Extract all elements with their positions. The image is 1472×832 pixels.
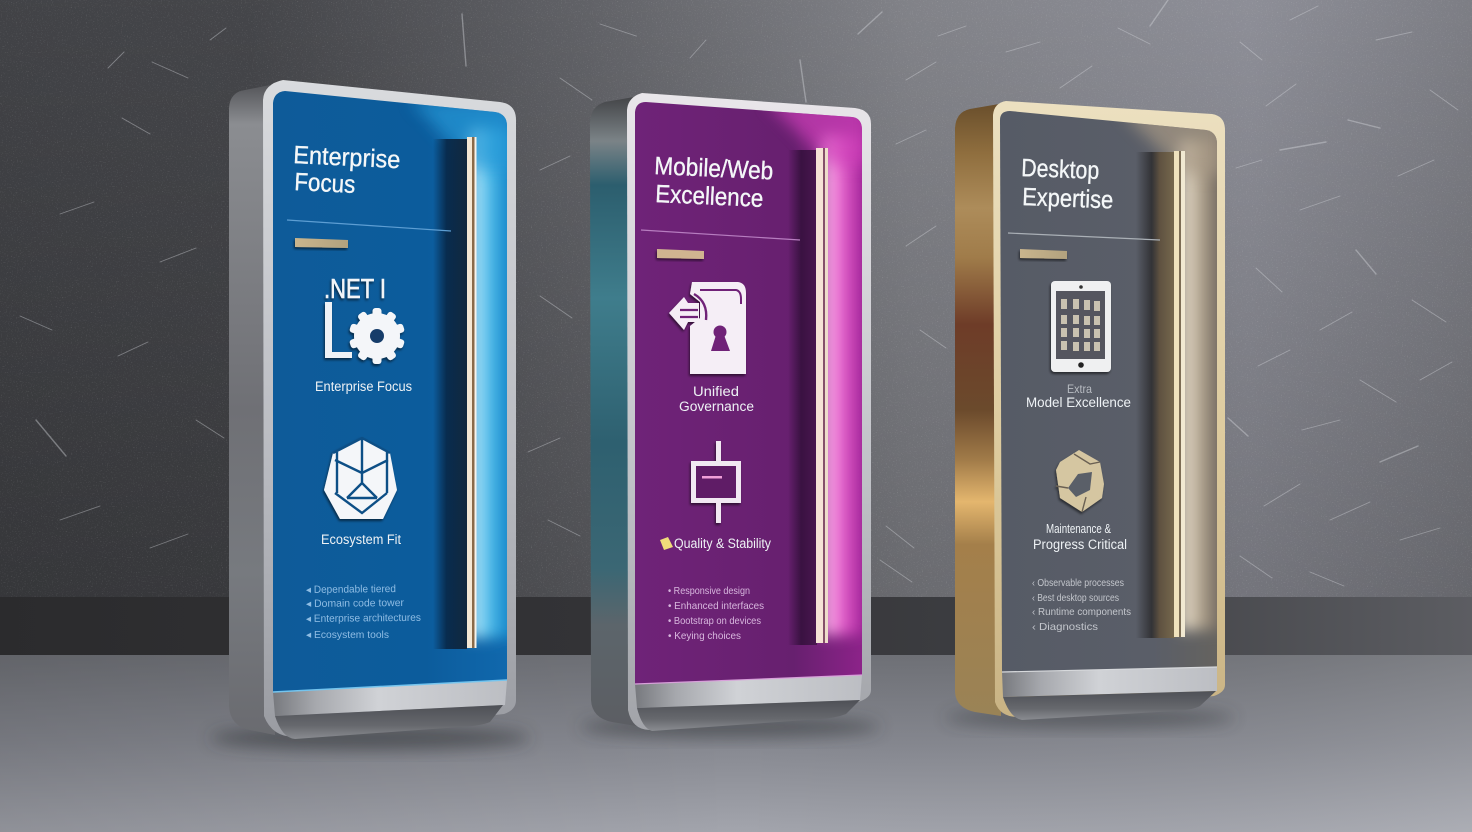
- label: Maintenance & Progress Critical: [1033, 522, 1127, 552]
- label: Model Excellence: Extra: [1067, 382, 1092, 396]
- icon: unified document with lock: [669, 282, 746, 374]
- heading: Desktop: [1021, 154, 1100, 185]
- base foot: [273, 680, 507, 739]
- panel: Enterprise Focus: [229, 80, 516, 739]
- label: Model Excellence: [1026, 382, 1131, 410]
- label: Unified Governance: [679, 384, 754, 414]
- icon: ecosystem polyhedron: [324, 438, 397, 519]
- bullet list: [668, 585, 764, 642]
- icon: tablet keypad: [1051, 281, 1111, 372]
- icon: .NET gear: .NET I: [324, 273, 386, 304]
- panel: Mobile/Web Excellence: [590, 93, 871, 731]
- icon: hexagon: [1056, 450, 1104, 512]
- bullet list: • Bootstrap on devices: [668, 615, 761, 627]
- heading: Enterprise: [293, 141, 401, 174]
- bullet list: • Responsive design: [668, 585, 750, 597]
- heading: [654, 152, 774, 213]
- bullet list: ◂ Enterprise architectures: [306, 612, 421, 625]
- bullet list: ◂ Domain code tower: [306, 597, 405, 610]
- base foot: [1002, 667, 1217, 720]
- heading: Excellence: [655, 180, 764, 213]
- base foot: [635, 675, 862, 731]
- bullet list: • Enhanced interfaces: [668, 600, 764, 612]
- heading: Focus: [294, 168, 356, 199]
- bullet list: [306, 583, 421, 641]
- label: Quality & Stability: Quality & Stability: [674, 536, 771, 551]
- tan tab: [1020, 249, 1067, 259]
- label: Unified Governance: Governance: [679, 399, 754, 414]
- bullet list: ‹ Diagnostics: [1032, 621, 1098, 633]
- label: Enterprise Focus: Enterprise Focus: [315, 379, 412, 394]
- wall background: [0, 0, 1472, 600]
- floor: [0, 655, 1472, 832]
- tan tab: [657, 249, 704, 259]
- light bar: [1136, 151, 1185, 638]
- baseboard: [0, 597, 1472, 656]
- bullet list: [1032, 577, 1131, 633]
- label: Ecosystem Fit: Ecosystem Fit: [321, 532, 401, 547]
- heading: Mobile/Web: [654, 152, 774, 185]
- bullet list: ‹ Runtime components: [1032, 606, 1131, 618]
- icon: stability frame: [694, 441, 738, 523]
- light bar: [788, 148, 828, 645]
- icon: .NET gear: [324, 273, 405, 364]
- heading: [293, 141, 401, 199]
- label: Maintenance & Progress Critical: Maintenance &: [1046, 522, 1112, 536]
- light bar: [433, 137, 476, 649]
- heading: [1021, 154, 1114, 214]
- panel: Desktop Expertise: [955, 101, 1225, 720]
- label: Maintenance & Progress Critical: Progress Critical: [1033, 537, 1127, 552]
- bullet list: ‹ Best desktop sources: [1032, 592, 1119, 604]
- bullet list: ‹ Observable processes: [1032, 577, 1124, 589]
- heading: Expertise: [1022, 183, 1114, 214]
- tan tab: [295, 238, 348, 248]
- label: Unified Governance: Unified: [693, 384, 739, 399]
- bullet list: ◂ Dependable tiered: [306, 583, 396, 596]
- bullet list: • Keying choices: [668, 630, 741, 642]
- label: Model Excellence: Model Excellence: [1026, 395, 1131, 410]
- bullet list: ◂ Ecosystem tools: [306, 629, 389, 641]
